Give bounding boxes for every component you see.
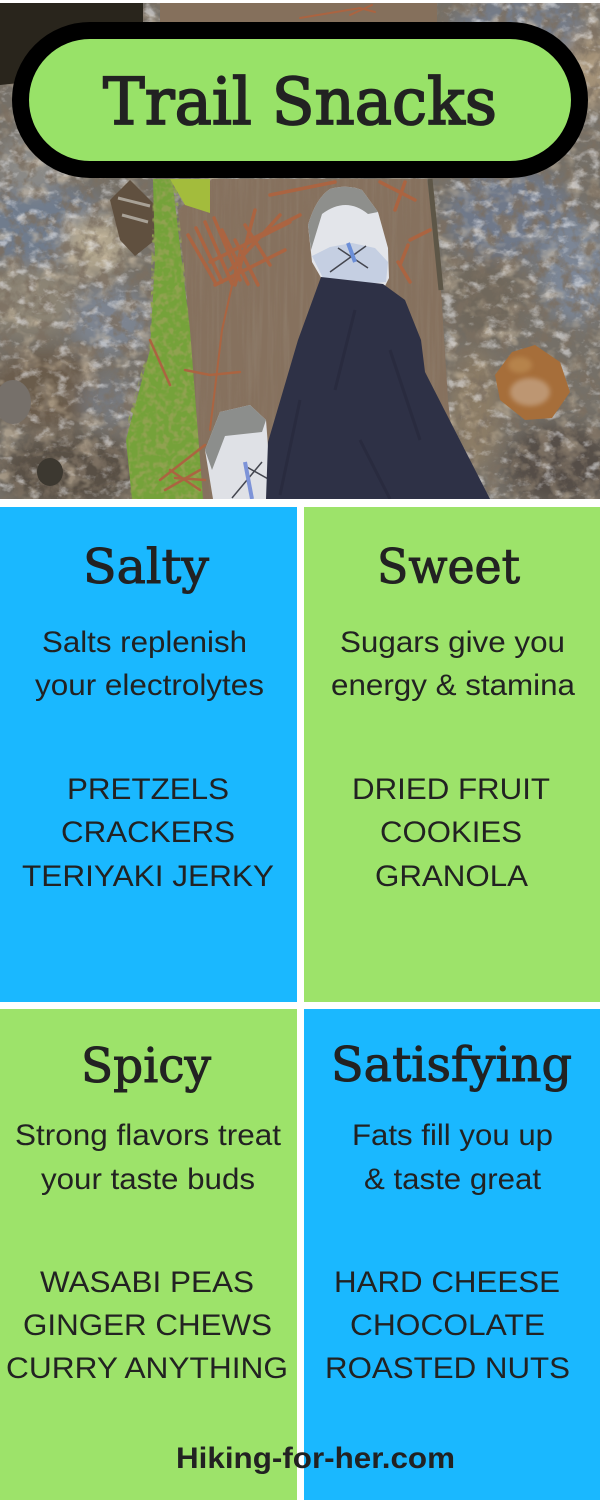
text: satisfying benefit: Fats fill you up <box>352 1119 553 1152</box>
water: right stream <box>445 0 600 505</box>
title: Trail Snacks <box>103 65 497 140</box>
heading: sweet: Sweet <box>377 539 520 595</box>
panel: salty <box>0 507 297 1002</box>
dark rock at top left <box>0 3 143 85</box>
list: satisfying snacks: HARD CHEESE <box>334 1266 560 1299</box>
panel: satisfying <box>304 1009 600 1500</box>
list: sweet snacks <box>352 773 550 893</box>
water: left stream <box>0 135 150 505</box>
trouser leg <box>266 277 490 499</box>
list: spicy snacks: CURRY ANYTHING <box>6 1352 288 1385</box>
text: sweet benefit: energy & stamina <box>331 669 575 702</box>
heading: satisfying: Satisfying <box>331 1037 572 1093</box>
moss strip <box>120 170 210 500</box>
list: sweet snacks: COOKIES <box>380 816 522 849</box>
list: salty snacks: TERIYAKI JERKY <box>22 860 274 893</box>
panel: sweet <box>304 507 600 1002</box>
text: sweet benefit: Sugars give you <box>340 626 565 659</box>
front shoe <box>308 187 389 288</box>
text: salty benefit: Salts replenish <box>42 626 247 659</box>
text: salty benefit: your electrolytes <box>35 669 264 702</box>
text: sweet benefit <box>331 626 575 702</box>
list: spicy snacks <box>6 1266 288 1385</box>
wooden plank <box>150 3 470 500</box>
list: sweet snacks: DRIED FRUIT <box>352 773 550 806</box>
list: satisfying snacks <box>325 1266 570 1385</box>
list: salty snacks <box>22 773 274 893</box>
rust-colored redwood needles <box>150 5 430 490</box>
text: salty benefit <box>35 626 264 702</box>
photo: hiker on plank over stream <box>0 0 600 505</box>
orange stream rock <box>495 345 570 420</box>
list: spicy snacks: WASABI PEAS <box>40 1266 254 1299</box>
list: spicy snacks: GINGER CHEWS <box>23 1309 272 1342</box>
text: spicy benefit: your taste buds <box>41 1163 255 1196</box>
list: salty snacks: PRETZELS <box>67 773 229 806</box>
text: spicy benefit: Strong flavors treat <box>15 1119 282 1152</box>
left stream rocks <box>0 380 63 486</box>
list: satisfying snacks: CHOCOLATE <box>350 1309 545 1342</box>
list: salty snacks: CRACKERS <box>61 816 235 849</box>
website credit: Hiking-for-her.com <box>176 1442 455 1475</box>
heading: spicy: Spicy <box>81 1038 211 1094</box>
panel: spicy <box>0 1009 297 1500</box>
brown rock beside moss <box>110 180 155 256</box>
list: satisfying snacks: ROASTED NUTS <box>325 1352 570 1385</box>
text: satisfying benefit <box>352 1119 553 1196</box>
back shoe <box>205 405 272 499</box>
title pill <box>20 30 580 170</box>
text: spicy benefit <box>15 1119 282 1196</box>
text: satisfying benefit: & taste great <box>364 1163 542 1196</box>
heading: salty: Salty <box>83 539 209 595</box>
list: sweet snacks: GRANOLA <box>375 860 528 893</box>
